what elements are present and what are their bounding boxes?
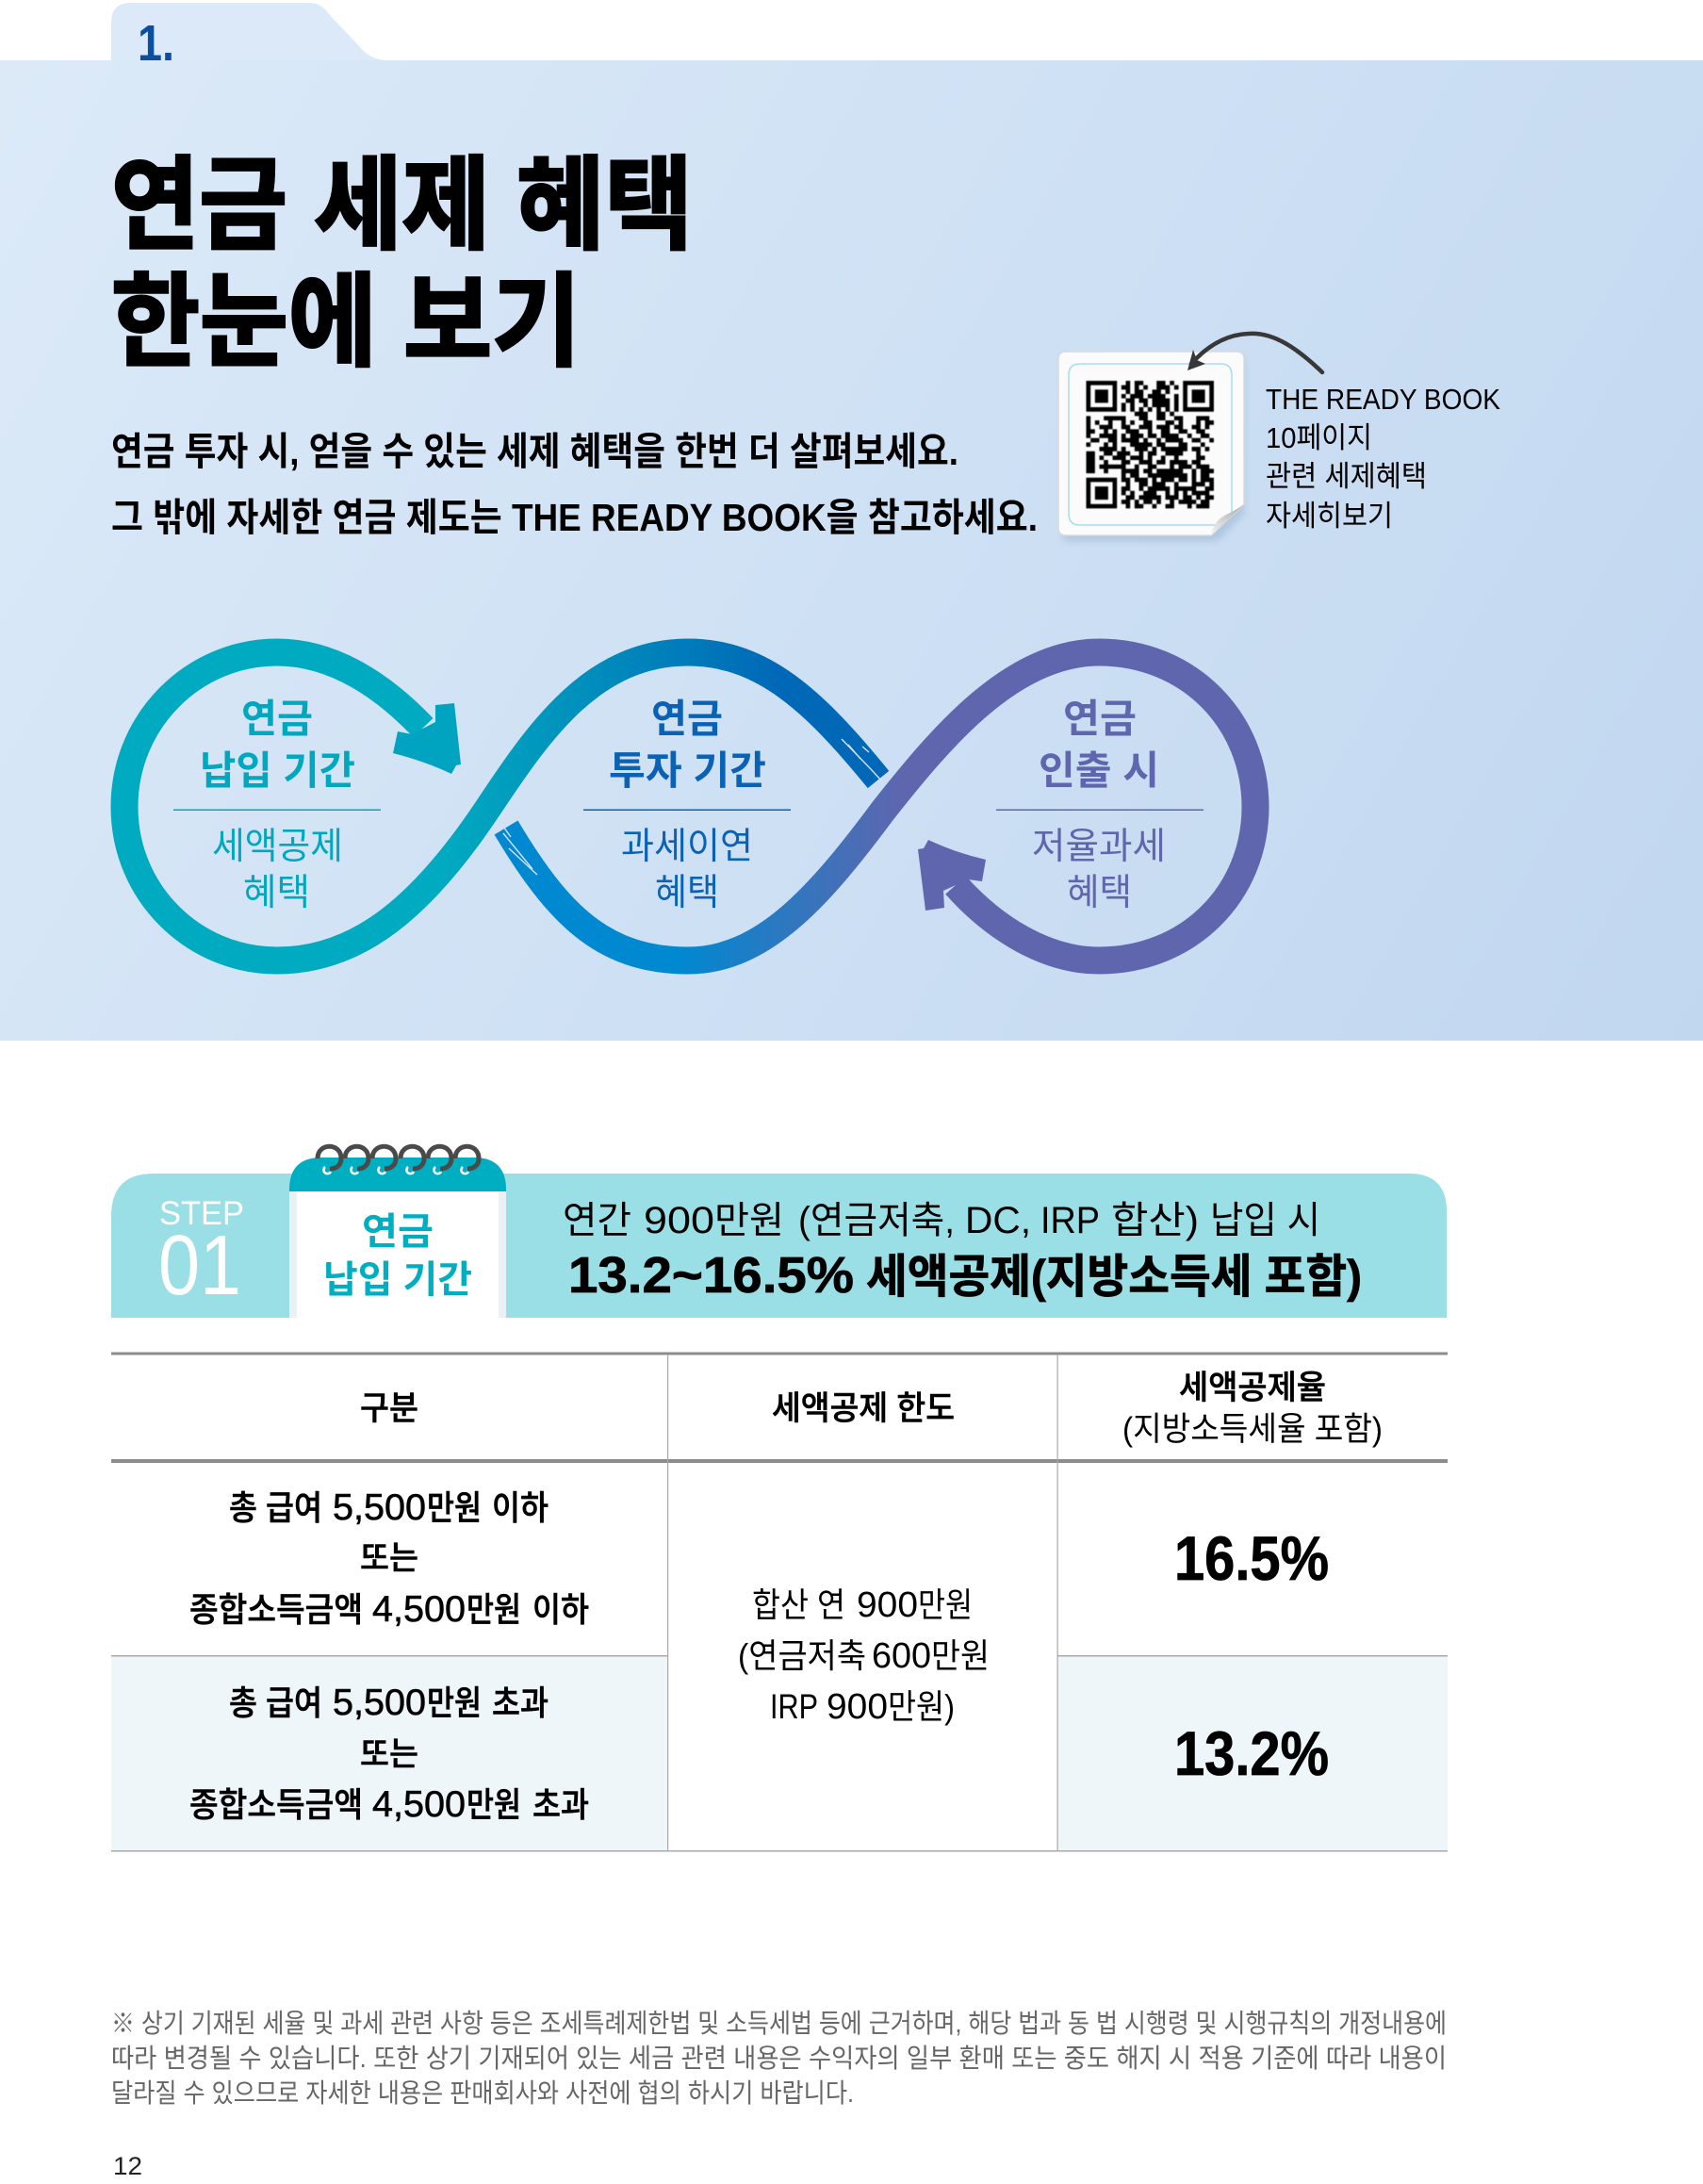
page number: 12 [113, 2152, 142, 2180]
limit cell: 만원 [931, 1636, 990, 1675]
rate 16.5%: 16.5% [1174, 1523, 1329, 1593]
loop 2 labels: 투자 기간 [609, 748, 766, 793]
banner headline: 만원 [714, 1200, 784, 1241]
row 1 condition: 또는 [360, 1540, 418, 1577]
loop 1 labels: 세액공제 [212, 827, 343, 867]
rate 13.2%: 13.2% [1174, 1718, 1329, 1788]
QR caption: 10페이지 [1266, 421, 1372, 454]
step number: STEP [159, 1195, 244, 1232]
intro text: 연금 투자 시, 얻을 수 있는 세제 혜택을 한번 더 살펴보세요. [111, 430, 958, 473]
banner headline: 합산) [1111, 1200, 1199, 1241]
QR pattern [1086, 381, 1214, 508]
row 2 condition [189, 1683, 589, 1825]
row 1 condition: 총 급여 [229, 1488, 322, 1527]
limit cell [738, 1585, 990, 1727]
QR caption: 관련 세제혜택 [1266, 460, 1427, 493]
QR caption: THE READY BOOK [1266, 383, 1500, 416]
footnote [111, 2009, 1447, 2108]
row 2 condition: 만원 [427, 1683, 482, 1722]
step number: 01 [158, 1219, 241, 1313]
calendar label [323, 1211, 472, 1301]
row 1 condition: 만원 [467, 1590, 521, 1629]
QR code card [1058, 352, 1244, 541]
band: teal to blue path with arrow [124, 652, 882, 961]
banner headline: 세액공제(지방소득세 포함) [866, 1252, 1362, 1303]
loop 3 labels: 혜택 [1067, 873, 1132, 913]
row 2 condition: 4,500 [372, 1784, 466, 1825]
banner headline: (연금저축, [798, 1200, 955, 1241]
loop 1 labels: 혜택 [243, 873, 310, 913]
limit cell: IRP [770, 1687, 818, 1726]
row 2 condition: 초과 [492, 1683, 549, 1722]
calendar label: 납입 기간 [323, 1259, 472, 1301]
row 2 condition: 5,500 [333, 1683, 426, 1723]
limit cell: 합산 연 [752, 1585, 845, 1624]
loop 3 labels: 인출 시 [1039, 748, 1159, 793]
row 1 condition: 4,500 [372, 1589, 466, 1630]
row 2 condition: 초과 [532, 1785, 589, 1824]
title: 한눈에 보기 [111, 265, 581, 379]
footnote: 달라질 수 있으므로 자세한 내용은 판매회사와 사전에 협의 하시기 바랍니다. [111, 2078, 854, 2108]
table [111, 1352, 1448, 1851]
title: 연금 세제 혜택 [111, 148, 693, 262]
limit cell: (연금저축 [738, 1636, 866, 1675]
row 1 condition: 종합소득금액 [189, 1590, 363, 1629]
banner headline: IRP [1040, 1200, 1100, 1241]
table header: 구분 [360, 1390, 418, 1427]
row 2 condition: 만원 [467, 1785, 521, 1824]
calendar icon [289, 1146, 506, 1318]
limit cell: 900 [857, 1585, 918, 1625]
row 2 condition: 종합소득금액 [189, 1785, 363, 1824]
loop 3 labels: 연금 [1063, 697, 1137, 741]
loop 2 labels: 연금 [651, 697, 723, 741]
intro text [111, 430, 1038, 539]
table header [360, 1370, 1383, 1448]
table header: 세액공제 한도 [772, 1390, 955, 1427]
infinity diagram [124, 652, 1255, 961]
footnote: 따라 변경될 수 있습니다. 또한 상기 기재되어 있는 세금 관련 내용은 수익자의 일부 환매 또는 중도 해지 시 적용 기준에 따라 내용이 [111, 2044, 1447, 2073]
table header: 세액공제율 [1179, 1370, 1326, 1406]
banner headline: 13.2~16.5% [568, 1247, 854, 1304]
band: blue to purple path with arrow [501, 652, 1255, 961]
loop 1 labels: 납입 기간 [200, 748, 355, 793]
banner headline [563, 1200, 1362, 1304]
row 1 condition: 이하 [532, 1590, 589, 1629]
panel: blue header background [0, 60, 1703, 1041]
banner headline: 900 [644, 1200, 714, 1241]
row 2 condition: 또는 [360, 1736, 418, 1773]
footnote: ※ 상기 기재된 세율 및 과세 관련 사항 등은 조세특례제한법 및 소득세법 등에 근거하며, 해당 법과 동 법 시행령 및 시행규칙의 개정내용에 [111, 2009, 1447, 2038]
step banner [111, 1146, 1447, 1318]
table header: (지방소득세율 포함) [1122, 1411, 1383, 1448]
row 1 condition: 5,500 [333, 1487, 426, 1528]
loop 3 labels: 저율과세 [1032, 827, 1166, 867]
row 1 condition [189, 1487, 589, 1630]
banner headline: 납입 시 [1210, 1200, 1320, 1241]
limit cell: 만원) [888, 1687, 955, 1726]
calendar label: 연금 [362, 1211, 434, 1253]
limit cell: 만원 [918, 1585, 973, 1624]
loop 3 labels [996, 697, 1204, 913]
loop 1 labels: 연금 [241, 697, 313, 741]
loop 2 labels: 혜택 [655, 873, 719, 913]
title [111, 148, 693, 379]
limit cell: 600 [872, 1636, 931, 1676]
loop 2 labels: 과세이연 [621, 827, 753, 867]
section number: 1. [138, 15, 174, 72]
intro text: 그 밖에 자세한 연금 제도는 THE READY BOOK을 참고하세요. [111, 496, 1038, 539]
row 1 condition: 만원 [427, 1488, 482, 1527]
row 2 condition: 총 급여 [229, 1683, 322, 1722]
arrow: pointing to QR code [1187, 334, 1322, 372]
limit cell: 900 [827, 1687, 888, 1727]
banner headline: DC, [965, 1200, 1031, 1241]
row 1 condition: 이하 [492, 1488, 549, 1527]
loop 2 labels [583, 697, 791, 913]
banner headline: 연간 [563, 1200, 631, 1241]
QR caption: 자세히보기 [1266, 500, 1393, 533]
section tab with number [111, 3, 396, 90]
QR caption [1266, 383, 1500, 533]
loop 1 labels [173, 697, 381, 913]
